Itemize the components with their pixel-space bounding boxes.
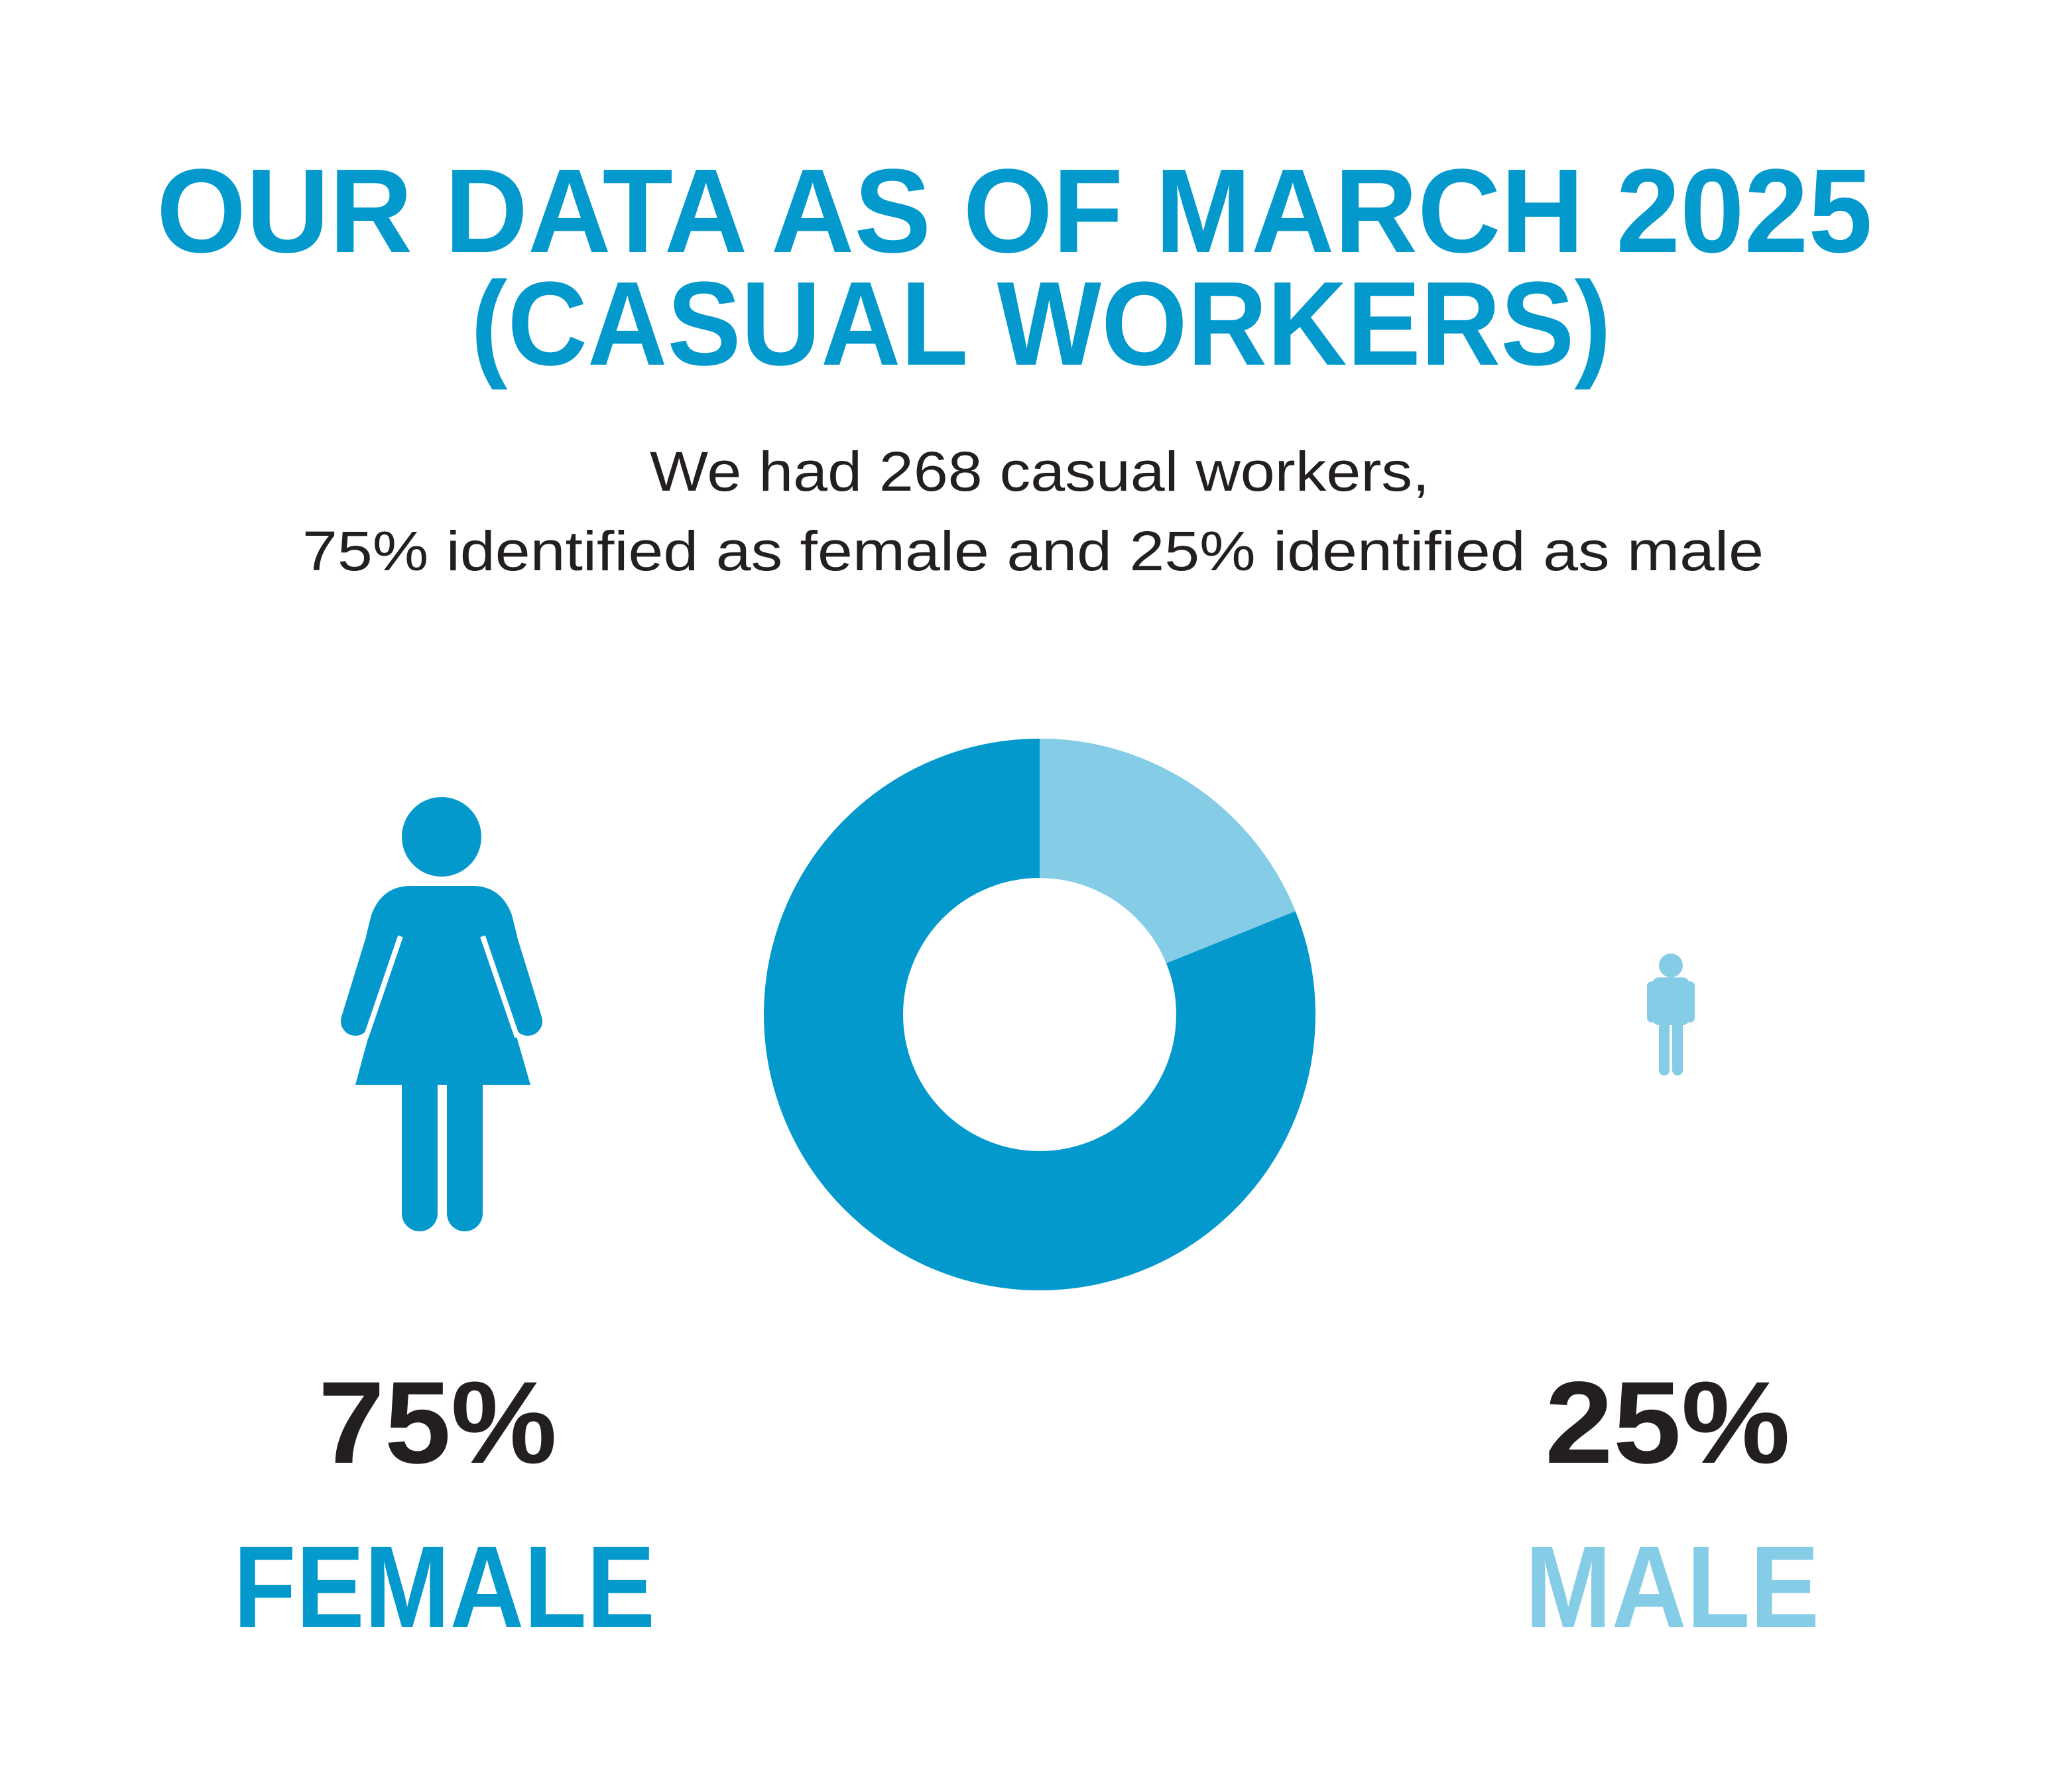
stat: female: 75% — [318, 1358, 557, 1488]
subtitle text: 75% identified as female and 25% identified as male — [302, 520, 1764, 582]
title: (CASUAL WORKERS) — [471, 257, 1611, 391]
stat: female — [233, 1358, 655, 1652]
donut chart — [833, 739, 1296, 1221]
icon: male — [1647, 954, 1695, 1076]
title: OUR DATA AS OF MARCH 2025 — [156, 145, 1872, 278]
title — [156, 145, 1872, 391]
icon: female — [355, 797, 530, 1231]
stat: male: MALE — [1525, 1522, 1819, 1652]
subtitle text — [302, 440, 1764, 582]
subtitle text: We had 268 casual workers, — [650, 440, 1430, 503]
stat: female: FEMALE — [233, 1522, 655, 1652]
stat: male: 25% — [1545, 1358, 1790, 1488]
stat: male — [1525, 1358, 1819, 1652]
